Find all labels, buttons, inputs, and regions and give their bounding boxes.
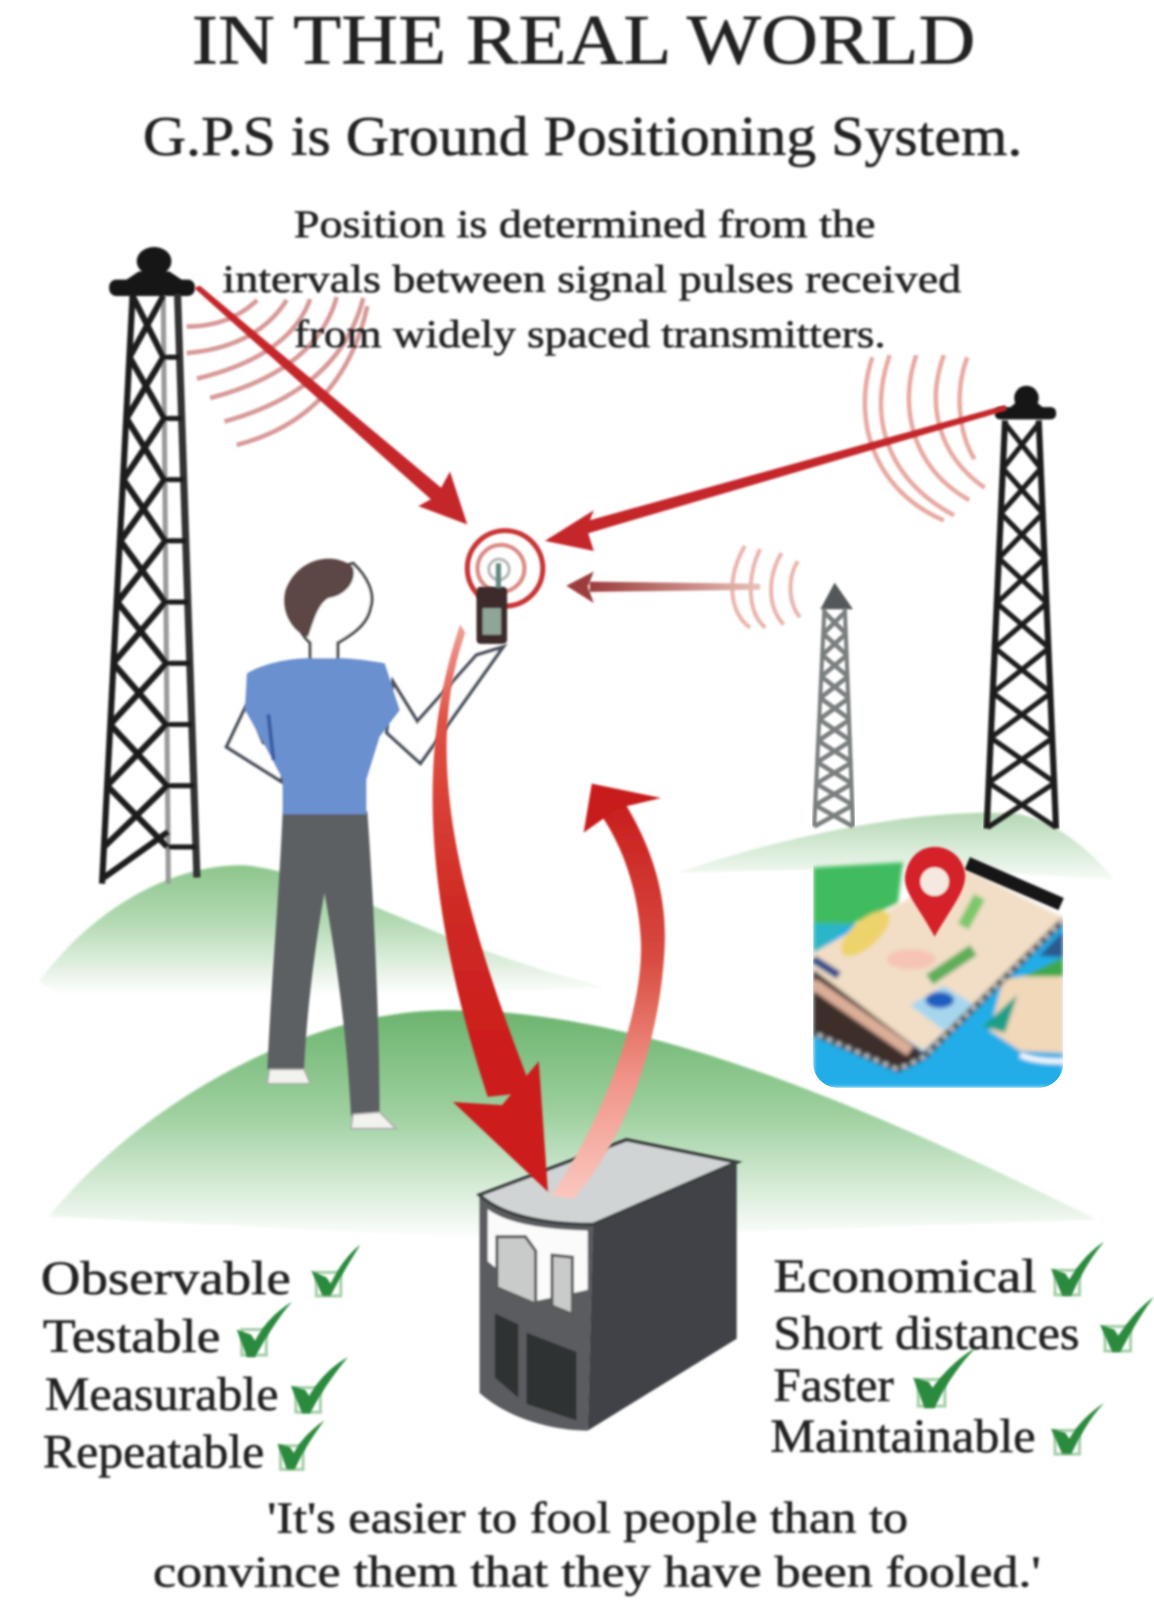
right tower bbox=[987, 386, 1056, 829]
person right arm bbox=[387, 647, 503, 763]
left tower inner post bbox=[163, 296, 168, 884]
hills bbox=[39, 813, 1114, 1240]
description bbox=[222, 203, 961, 356]
check boxes bbox=[242, 1270, 1131, 1469]
quote: convince them that they have been fooled.' bbox=[153, 1547, 1041, 1597]
down arrow to server bbox=[433, 625, 548, 1192]
server top bbox=[480, 1140, 737, 1224]
back left hill bbox=[39, 865, 607, 995]
server front face bbox=[480, 1195, 593, 1431]
map app icon bbox=[813, 862, 1063, 1088]
up arrow head bbox=[584, 784, 661, 833]
down arrow shaft bbox=[433, 625, 533, 1097]
map green land bbox=[813, 862, 903, 927]
quote: 'It's easier to fool people than to bbox=[267, 1493, 908, 1543]
person left arm bbox=[227, 704, 286, 782]
phone dashed rim bbox=[813, 920, 1063, 1069]
up arrow from server bbox=[551, 784, 665, 1199]
server vents bbox=[495, 1313, 576, 1420]
arrow: right tower to phone bbox=[545, 405, 1007, 551]
map right features bbox=[983, 931, 1063, 1033]
quote bbox=[153, 1493, 1041, 1597]
list: right qualities: Maintainable bbox=[770, 1410, 1036, 1463]
server bbox=[480, 1140, 737, 1431]
map pink area bbox=[887, 949, 936, 969]
list: right qualities: Economical bbox=[773, 1250, 1037, 1303]
right hill bbox=[679, 813, 1114, 880]
description: intervals between signal pulses received bbox=[222, 258, 961, 301]
shoreline bbox=[1020, 1055, 1063, 1061]
phone lower edge bbox=[813, 969, 923, 1067]
receiver signal rings bbox=[467, 531, 543, 606]
left tower bbox=[102, 247, 197, 884]
list: left qualities: Measurable bbox=[45, 1368, 279, 1421]
title: IN THE REAL WORLD bbox=[192, 0, 975, 79]
subtitle: G.P.S is Ground Positioning System. bbox=[143, 106, 1022, 168]
list: right qualities bbox=[770, 1250, 1080, 1463]
small tower bbox=[814, 583, 853, 827]
phone top edge bbox=[967, 863, 1061, 904]
small tower lattice bbox=[814, 608, 853, 827]
person shirt bbox=[245, 658, 400, 814]
arrow: left tower to phone bbox=[194, 286, 467, 525]
up arrow shaft bbox=[551, 796, 665, 1199]
right radio waves bbox=[865, 355, 985, 520]
check marks bbox=[237, 1242, 1154, 1469]
description: from widely spaced transmitters. bbox=[294, 313, 886, 356]
person bbox=[227, 559, 503, 1129]
handheld receiver bbox=[476, 563, 507, 644]
map right land bbox=[990, 969, 1063, 1053]
left tower lattice bbox=[102, 294, 133, 884]
map teal water bbox=[813, 923, 849, 957]
person pants bbox=[267, 811, 380, 1116]
front hill bbox=[49, 1010, 1097, 1240]
list: left qualities bbox=[41, 1252, 291, 1478]
person sleeve fold bbox=[268, 714, 273, 760]
small tower top bbox=[820, 583, 853, 609]
list: left qualities: Repeatable bbox=[43, 1425, 264, 1478]
person shoes bbox=[267, 1069, 310, 1084]
down arrow head bbox=[453, 1061, 548, 1192]
left tower top bbox=[109, 247, 195, 296]
server drive bays bbox=[497, 1237, 572, 1314]
small tower arcs bbox=[732, 546, 800, 628]
person neck and head bbox=[295, 563, 372, 661]
signal to receiver arrows bbox=[194, 286, 1007, 603]
list: left qualities: Testable bbox=[43, 1310, 220, 1363]
left radio waves bbox=[187, 297, 367, 445]
list: right qualities: Faster bbox=[773, 1359, 894, 1412]
description: Position is determined from the bbox=[294, 203, 875, 246]
arrow: small tower to phone bbox=[566, 571, 760, 603]
map blue location bbox=[910, 986, 974, 1031]
list: right qualities: Short distances bbox=[773, 1307, 1080, 1360]
map green roads bbox=[930, 897, 980, 980]
server white panel bbox=[488, 1209, 588, 1301]
person hair bbox=[284, 559, 354, 637]
right tower top bbox=[995, 386, 1056, 419]
right tower lattice bbox=[987, 420, 1056, 829]
list: left qualities: Observable bbox=[41, 1252, 291, 1305]
map yellow area bbox=[838, 907, 892, 958]
map pin bbox=[905, 847, 965, 937]
phone screen bbox=[813, 867, 1063, 1051]
map water background bbox=[813, 923, 1063, 1088]
server right face bbox=[588, 1162, 737, 1431]
